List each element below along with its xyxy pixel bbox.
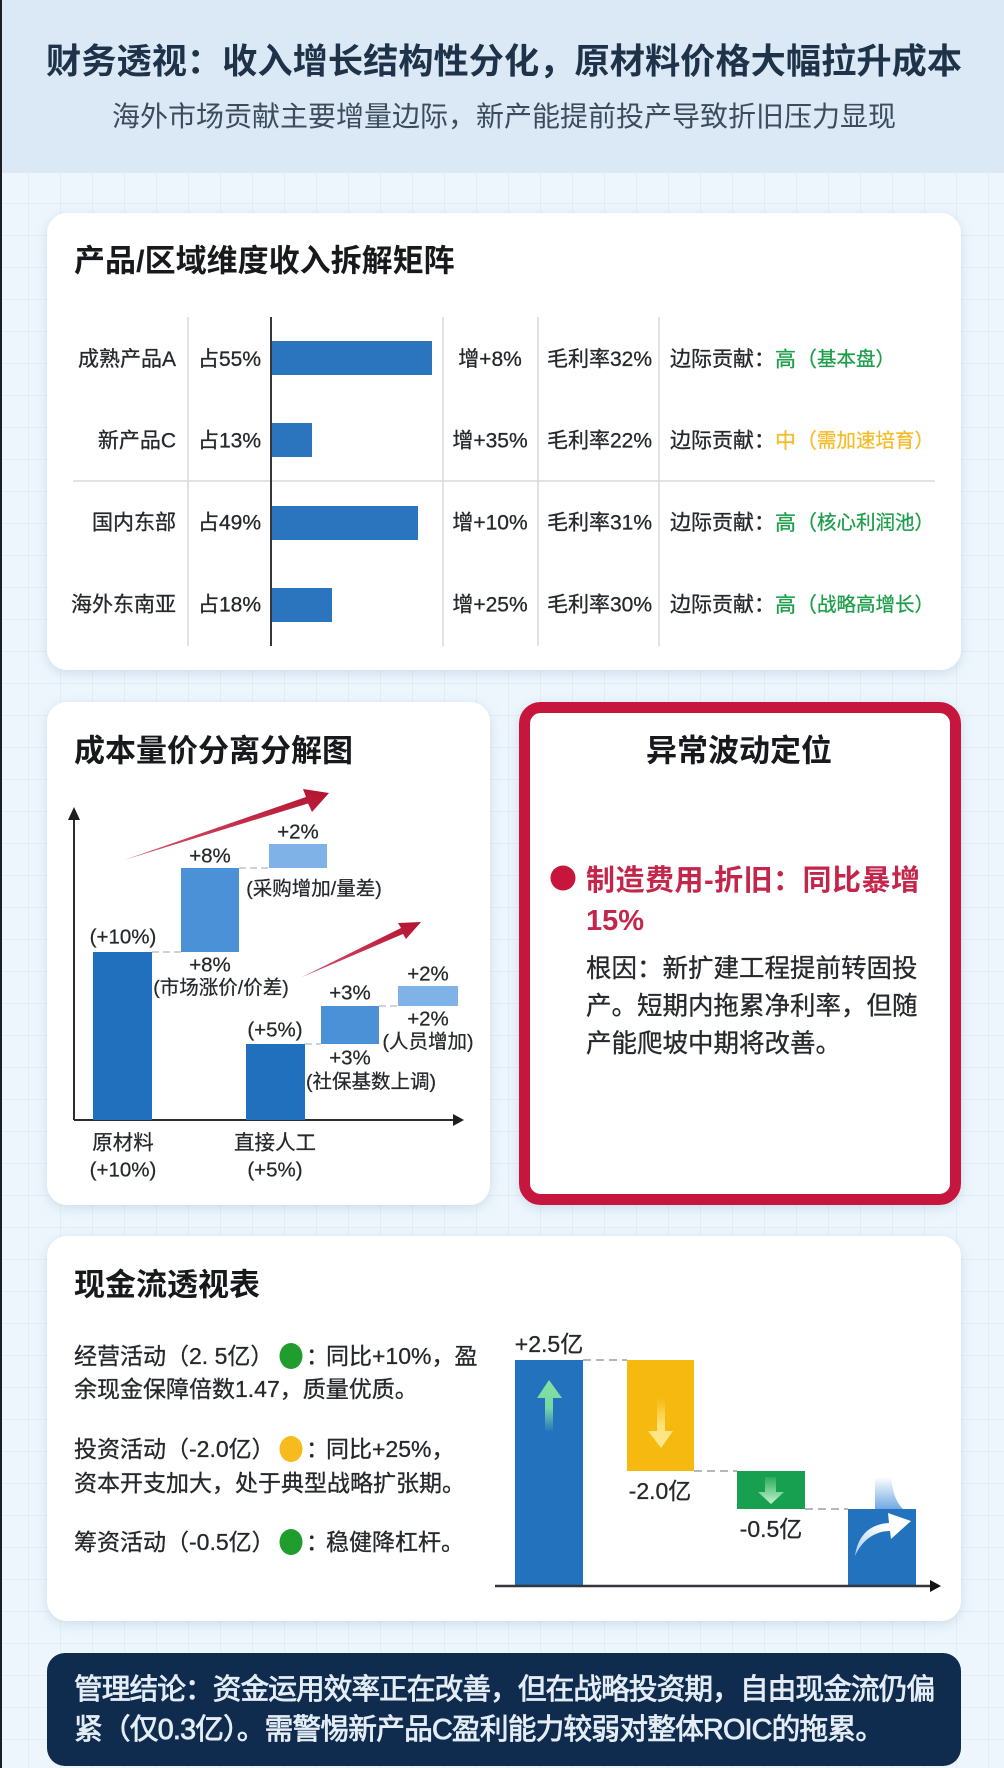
chart labels: -2.0亿 bbox=[629, 1478, 691, 1504]
heading: revenue matrix: 产品/区域维度收入拆解矩阵 bbox=[74, 244, 455, 278]
alert text: 制造费用-折旧：同比暴增 bbox=[586, 864, 920, 897]
chart labels: +2% bbox=[407, 1008, 449, 1030]
panel: anomaly callout bbox=[524, 708, 956, 1200]
row: 新产品C: 占13% bbox=[198, 430, 261, 452]
cash flow item: investing: ： bbox=[306, 1436, 329, 1462]
cash flow item: operating: 同比+10%，盈 bbox=[326, 1343, 477, 1369]
chart labels: (采购增加/量差) bbox=[246, 878, 382, 900]
cash flow item: investing: 资本开支加大，处于典型战略扩张期。 bbox=[74, 1470, 465, 1496]
chart labels: +3% bbox=[329, 1046, 371, 1070]
row: 国内东部: 边际贡献：高（核心利润池） bbox=[670, 512, 934, 534]
icon: red bullet bbox=[550, 866, 576, 890]
row: 成熟产品A: 增+8% bbox=[458, 348, 522, 371]
row: 成熟产品A bbox=[78, 341, 895, 375]
chart labels: +8% bbox=[189, 954, 231, 976]
row: 成熟产品A: 毛利率32% bbox=[547, 348, 652, 371]
bar: investing bbox=[627, 1360, 694, 1471]
root cause text bbox=[586, 955, 918, 1058]
row: 海外东南亚: 毛利率30% bbox=[547, 594, 652, 616]
chart labels: (人员增加) bbox=[382, 1031, 474, 1053]
connectors bbox=[152, 868, 398, 1044]
bar: free cash flow bbox=[848, 1509, 916, 1586]
icon: green down arrow bbox=[758, 1477, 784, 1504]
root cause text: 产。短期内拖累净利率，但随 bbox=[586, 992, 918, 1020]
root cause text: 产能爬坡中期将改善。 bbox=[586, 1030, 841, 1058]
cash flow item: investing: 同比+25%， bbox=[326, 1436, 454, 1462]
cash flow item: investing bbox=[74, 1436, 465, 1496]
title: 财务透视：收入增长结构性分化，原材料价格大幅拉升成本 bbox=[46, 34, 962, 84]
chart labels: 直接人工 bbox=[234, 1132, 316, 1154]
arrow: material trend bbox=[124, 789, 329, 860]
row: 海外东南亚: 占18% bbox=[198, 594, 261, 616]
row: 国内东部 bbox=[92, 506, 934, 540]
cash flow item: investing: 投资活动（-2.0亿） bbox=[74, 1436, 275, 1462]
header band bbox=[0, 0, 1004, 173]
alert text bbox=[586, 864, 920, 937]
row: 国内东部: 毛利率31% bbox=[547, 512, 652, 534]
panel: revenue matrix bbox=[47, 213, 961, 670]
heading: anomaly: 异常波动定位 bbox=[646, 734, 832, 768]
row: 新产品C bbox=[98, 423, 934, 457]
chart labels: (+10%) bbox=[90, 1158, 156, 1182]
icon: curved arrow bbox=[855, 1513, 911, 1556]
row: 成熟产品A: 边际贡献：高（基本盘） bbox=[670, 348, 895, 371]
icon: down arrow bbox=[648, 1398, 673, 1448]
chart labels: (+10%) bbox=[90, 926, 156, 948]
panel: cash flow bbox=[47, 1236, 961, 1621]
bar: operating bbox=[515, 1360, 583, 1586]
bars bbox=[93, 844, 458, 1120]
heading: cost decomposition: 成本量价分离分解图 bbox=[74, 734, 353, 768]
row: 海外东南亚: 边际贡献：高（战略高增长） bbox=[670, 594, 934, 616]
row: 海外东南亚 bbox=[71, 588, 934, 622]
cash flow item: operating bbox=[74, 1343, 477, 1402]
cash flow item: financing bbox=[74, 1529, 464, 1555]
cash flow item: operating: 余现金保障倍数1.47，质量优质。 bbox=[74, 1376, 418, 1402]
chart labels: (社保基数上调) bbox=[306, 1071, 436, 1093]
row: 国内东部: 占49% bbox=[198, 512, 261, 534]
subtitle: 海外市场贡献主要增量边际，新产能提前投产导致折旧压力显现 bbox=[112, 95, 896, 135]
panel: cost decomposition bbox=[47, 702, 490, 1205]
panel: management conclusion bbox=[47, 1653, 961, 1766]
chart labels: +2% bbox=[277, 820, 319, 844]
cash flow item: financing: 稳健降杠杆。 bbox=[326, 1529, 464, 1555]
chart labels: 原材料 bbox=[92, 1132, 154, 1154]
chart labels: -0.5亿 bbox=[740, 1516, 802, 1542]
row: 海外东南亚: 增+25% bbox=[452, 594, 528, 616]
cash flow item: financing: 筹资活动（-0.5亿） bbox=[74, 1529, 275, 1555]
conclusion text bbox=[74, 1674, 935, 1746]
alert text: 15% bbox=[586, 905, 644, 937]
root cause text: 根因：新扩建工程提前转固投 bbox=[586, 955, 918, 983]
row: 新产品C: 新产品C bbox=[98, 430, 176, 452]
chart labels bbox=[515, 1331, 802, 1542]
cash flow item: operating: ： bbox=[306, 1343, 329, 1369]
axis bbox=[495, 1580, 941, 1592]
row: 新产品C: 毛利率22% bbox=[547, 430, 652, 452]
icon: up arrow bbox=[537, 1380, 562, 1431]
connectors bbox=[583, 1360, 848, 1509]
row: 国内东部: 国内东部 bbox=[92, 512, 176, 534]
bar: financing bbox=[737, 1471, 805, 1509]
cash flow waterfall chart bbox=[495, 1331, 941, 1592]
chart labels: (市场涨价/价差) bbox=[153, 977, 289, 999]
row: 国内东部: 增+10% bbox=[452, 512, 528, 534]
arrow: labor trend bbox=[301, 922, 421, 978]
chart labels: +2.5亿 bbox=[515, 1331, 583, 1357]
chart labels: +8% bbox=[189, 844, 231, 868]
axes bbox=[68, 807, 464, 1126]
glow above final bar bbox=[875, 1477, 903, 1509]
row: 海外东南亚: 海外东南亚 bbox=[71, 594, 176, 616]
row: 新产品C: 增+35% bbox=[452, 430, 528, 452]
table grid lines bbox=[73, 317, 935, 646]
cash flow item: financing: ： bbox=[306, 1529, 329, 1555]
chart labels: +3% bbox=[329, 982, 371, 1004]
row: 新产品C: 边际贡献：中（需加速培育） bbox=[670, 430, 934, 452]
chart labels: (+5%) bbox=[247, 1158, 303, 1182]
conclusion text: 紧（仅0.3亿）。需警惕新产品C盈利能力较弱对整体ROIC的拖累。 bbox=[74, 1714, 884, 1746]
conclusion text: 管理结论：资金运用效率正在改善，但在战略投资期，自由现金流仍偏 bbox=[74, 1674, 935, 1706]
chart labels bbox=[90, 820, 474, 1182]
heading: cash flow: 现金流透视表 bbox=[74, 1268, 260, 1302]
waterfall chart bbox=[68, 789, 474, 1182]
row: 成熟产品A: 成熟产品A bbox=[78, 348, 176, 371]
chart labels: (+5%) bbox=[247, 1018, 303, 1042]
left edge strip bbox=[0, 0, 2, 1768]
row: 成熟产品A: 占55% bbox=[198, 348, 261, 371]
chart labels: +2% bbox=[407, 962, 449, 986]
cash flow item: operating: 经营活动（2. 5亿） bbox=[74, 1343, 273, 1369]
